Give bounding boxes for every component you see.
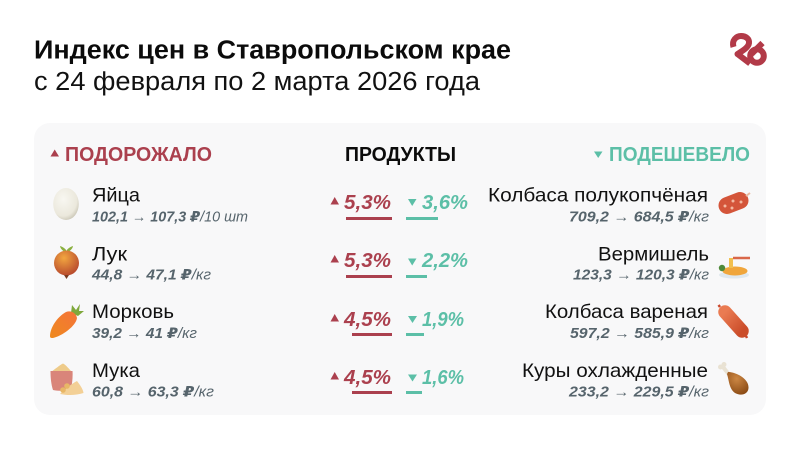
item: onion: Лук xyxy=(92,244,128,266)
item: carrot xyxy=(92,301,197,342)
item: boiled sausage: Колбаса вареная xyxy=(545,301,708,323)
change row 3: 1,9% xyxy=(422,308,464,331)
item: flour: Мука xyxy=(92,360,140,382)
item: flour: 60,8 → 63,3 ₽ /кг xyxy=(92,384,214,400)
title: Индекс цен в Ставропольском крае xyxy=(34,36,511,64)
change row 4 xyxy=(330,366,464,394)
heading: products: ПРОДУКТЫ xyxy=(345,144,456,166)
change row 2: 5,3% xyxy=(344,249,391,272)
item: carrot: 39,2 → 41 ₽ /кг xyxy=(92,326,197,342)
item: eggs: Яйца xyxy=(92,184,140,206)
change row 4: 4,5% xyxy=(343,366,391,389)
item: eggs: 102,1 → 107,3 ₽/10 шт xyxy=(92,210,248,226)
change row 1: 3,6% xyxy=(422,191,468,214)
panel: price table xyxy=(34,123,766,415)
icon: egg xyxy=(53,188,79,220)
icon: vermicelli xyxy=(719,258,750,278)
item: carrot: Морковь xyxy=(92,301,174,323)
item: flour xyxy=(92,360,214,400)
icon: flour xyxy=(50,364,84,395)
item: chilled chicken: 233,2 → 229,5 ₽ /кг xyxy=(568,384,709,400)
item: chilled chicken: Куры охлажденные xyxy=(522,360,708,382)
icon: onion xyxy=(54,246,79,279)
item: boiled sausage: 597,2 → 585,9 ₽ /кг xyxy=(570,326,709,342)
item: vermicelli xyxy=(573,244,709,284)
item: semi-smoked sausage: 709,2 → 684,5 ₽ /кг xyxy=(569,210,709,226)
item: onion: 44,8 → 47,1 ₽ /кг xyxy=(91,268,211,284)
item: semi-smoked sausage: Колбаса полукопчёная xyxy=(488,184,708,206)
subtitle: с 24 февраля по 2 марта 2026 года xyxy=(34,68,481,96)
item: onion xyxy=(91,244,211,284)
heading: more expensive: ПОДОРОЖАЛО xyxy=(65,144,212,166)
icon: boiled sausage xyxy=(718,305,747,338)
change row 3 xyxy=(330,308,464,336)
item: chilled chicken xyxy=(522,360,709,400)
item: vermicelli: Вермишель xyxy=(598,244,709,266)
icon: carrot xyxy=(50,304,84,338)
item: semi-smoked sausage xyxy=(488,184,709,226)
heading: cheaper: ПОДЕШЕВЕЛО xyxy=(609,144,750,166)
item: boiled sausage xyxy=(545,301,709,342)
change row 2: 2,2% xyxy=(421,249,468,272)
logo: 26 xyxy=(733,36,764,64)
change row 2 xyxy=(330,249,468,278)
change row 1 xyxy=(330,191,468,220)
change row 3: 4,5% xyxy=(343,308,391,331)
icon: chicken leg xyxy=(718,362,749,395)
item: vermicelli: 123,3 → 120,3 ₽ /кг xyxy=(573,268,709,284)
change row 4: 1,6% xyxy=(422,366,464,389)
change row 1: 5,3% xyxy=(344,191,391,214)
item: eggs xyxy=(92,184,248,226)
icon: semi-smoked sausage xyxy=(724,193,750,210)
